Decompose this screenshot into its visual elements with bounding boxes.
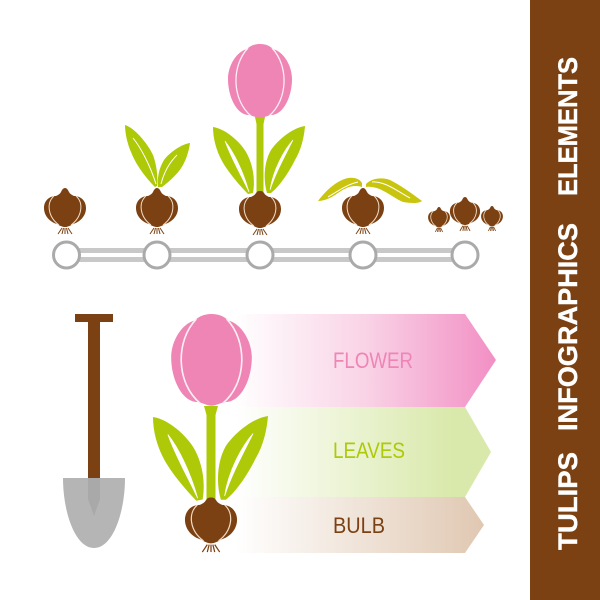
side title band: INFOGRAPHICS <box>553 223 583 431</box>
side title band: ELEMENTS <box>553 57 583 196</box>
arrow: leaves <box>235 407 491 497</box>
side title band: TULIPS <box>553 452 583 550</box>
timeline <box>54 242 478 268</box>
stage 5: three bulbs <box>428 197 503 232</box>
side title band <box>530 0 600 600</box>
stage 3: flowering tulip <box>213 44 305 235</box>
arrow: flower: FLOWER <box>333 348 413 373</box>
arrow: leaves: LEAVES <box>333 438 405 463</box>
shovel <box>63 314 125 548</box>
arrow: bulb <box>235 497 484 553</box>
stage 1: bulb <box>44 188 86 234</box>
arrow: flower <box>235 314 496 407</box>
stage 4: wilted leaves <box>318 178 422 234</box>
arrow: bulb: BULB <box>333 513 385 538</box>
stage 2: sprout <box>125 125 190 234</box>
large tulip diagram <box>153 314 268 552</box>
